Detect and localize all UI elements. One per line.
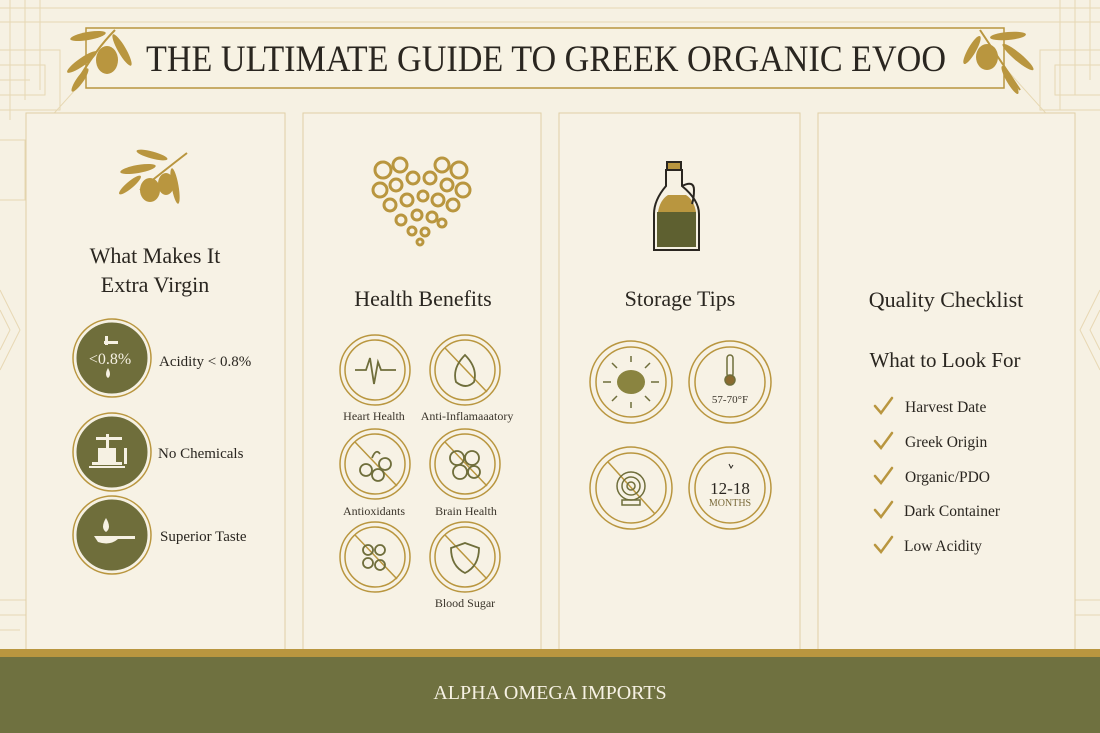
title box — [86, 28, 1004, 88]
item: superior taste — [73, 496, 247, 574]
icon: olive branch right — [961, 30, 1036, 96]
panel: quality checklist: Harvest Date — [905, 399, 986, 416]
heading: Quality Checklist — [869, 287, 1023, 312]
icon: oil bottle — [654, 162, 699, 250]
item: no chemicals: No Chemicals — [158, 446, 244, 462]
panel: storage tips: 57-70°F — [712, 394, 748, 406]
panel: quality checklist: Dark Container — [904, 503, 1001, 520]
panel: quality checklist — [818, 113, 1075, 650]
panel: health benefits: Anti-Inflamaaatory — [421, 409, 513, 423]
checklist — [875, 398, 892, 552]
heading: Health Benefits — [354, 286, 492, 311]
icon: olive branch left — [65, 29, 134, 93]
icon: 12-18 months: 12-18 — [710, 479, 750, 498]
panel: health benefits: Blood Sugar — [435, 596, 495, 610]
icon: olive sprig — [117, 147, 187, 204]
panel: health benefits: Heart Health — [343, 409, 405, 423]
panel: what makes it extra virgin: Extra Virgin — [101, 272, 209, 297]
item: no chemicals — [73, 413, 244, 491]
item: acidity: Acidity < 0.8% — [159, 354, 251, 370]
panel: health benefits: Antioxidants — [343, 504, 405, 518]
footer text: ALPHA OMEGA IMPORTS — [433, 682, 667, 704]
panel: what makes it extra virgin — [26, 113, 285, 650]
panel: storage tips: MONTHS — [709, 498, 751, 509]
panel: quality checklist: Greek Origin — [905, 434, 987, 451]
panel: health benefits: Brain Health — [435, 504, 497, 518]
panel: storage tips — [559, 113, 800, 650]
item: acidity: <0.8% — [89, 351, 131, 368]
panel: quality checklist: What to Look For — [869, 348, 1021, 372]
item: acidity — [73, 319, 251, 397]
icon: filigree heart — [373, 158, 470, 245]
panel: quality checklist: Organic/PDO — [905, 469, 990, 486]
icon: no heat — [617, 472, 645, 505]
footer band — [0, 649, 1100, 733]
heading: Storage Tips — [625, 286, 735, 311]
icons grid — [340, 335, 500, 592]
panel: quality checklist: Low Acidity — [904, 538, 982, 555]
icon: brain sun — [617, 370, 645, 394]
panel: health benefits — [303, 113, 541, 650]
heading: What Makes It — [90, 243, 220, 268]
item: superior taste: Superior Taste — [160, 529, 247, 545]
icon: thermometer — [725, 355, 735, 385]
title: THE ULTIMATE GUIDE TO GREEK ORGANIC EVOO — [146, 39, 946, 80]
